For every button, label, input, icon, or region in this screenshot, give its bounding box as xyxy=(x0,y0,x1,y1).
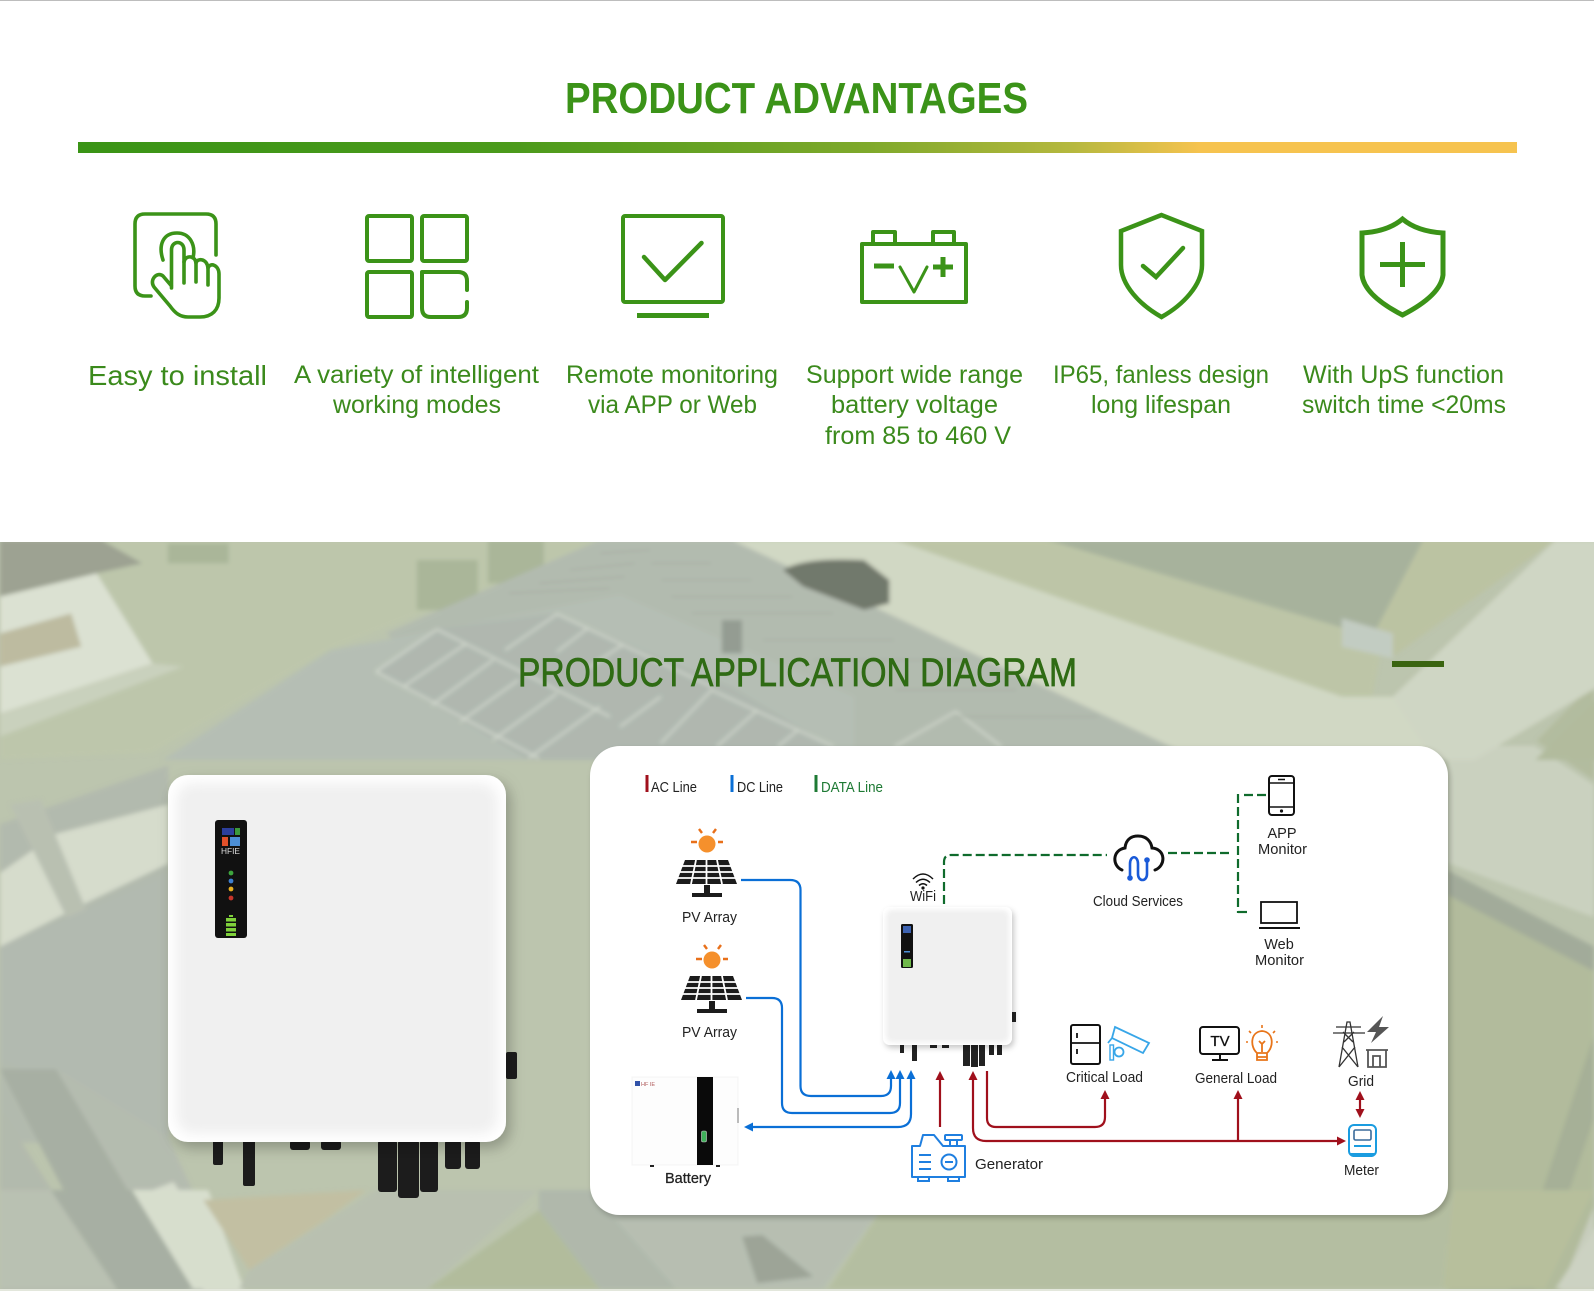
label xyxy=(1302,361,1506,419)
icon: critical load: Critical Load xyxy=(1066,1070,1143,1086)
label: With UpS function xyxy=(1303,361,1504,389)
icon: meter xyxy=(1344,1125,1379,1179)
icon: general load xyxy=(1195,1025,1278,1087)
inverter body xyxy=(168,775,506,1142)
label: from 85 to 460 V xyxy=(825,422,1011,450)
icon: web monitor laptop: Monitor xyxy=(1255,953,1304,969)
advantage: IP65 xyxy=(1053,215,1269,419)
label: Remote monitoring xyxy=(566,361,778,389)
AC lines xyxy=(936,1071,1364,1146)
icon: PV array 2 xyxy=(681,945,742,1041)
label: Easy to install xyxy=(88,360,267,391)
top rule xyxy=(0,0,1594,1)
icon: meter: Meter xyxy=(1344,1163,1379,1179)
title: product advantages: PRODUCT ADVANTAGES xyxy=(565,74,1028,123)
advantage: remote monitoring xyxy=(566,216,778,419)
icon: web monitor laptop xyxy=(1255,902,1304,969)
panel: application diagram xyxy=(590,746,1448,1215)
DC lines xyxy=(741,880,916,1132)
icon: generator: Generator xyxy=(975,1156,1043,1173)
small inverter xyxy=(883,907,1016,1067)
icon: grid tower xyxy=(1333,1016,1389,1090)
label: A variety of intelligent xyxy=(294,361,539,389)
icon: WiFi: WiFi xyxy=(910,889,936,905)
label: via APP or Web xyxy=(588,391,757,419)
product photo: large inverter xyxy=(168,775,517,1198)
background: aerial photo of house xyxy=(0,540,1594,1292)
legend: DATA Line xyxy=(821,780,883,796)
icon: touch hand xyxy=(135,214,219,317)
legend: DC Line xyxy=(737,780,783,796)
icon: window grid xyxy=(367,216,467,317)
icon: WiFi xyxy=(910,874,936,905)
icon: battery unit: HF IE xyxy=(641,1082,655,1088)
icon: cloud services xyxy=(1093,836,1183,910)
icon: app monitor phone: Monitor xyxy=(1258,842,1307,858)
label: switch time <20ms xyxy=(1302,391,1506,419)
advantage: UPS function xyxy=(1302,219,1506,419)
label: battery voltage xyxy=(831,391,998,419)
icon: web monitor laptop: Web xyxy=(1264,937,1294,953)
icon: general load: General Load xyxy=(1195,1071,1277,1087)
accent dash xyxy=(1392,661,1444,667)
data lines xyxy=(944,794,1266,913)
icon: generator xyxy=(912,1135,1043,1181)
icon: grid tower: Grid xyxy=(1348,1074,1374,1090)
icon: cloud services: Cloud Services xyxy=(1093,894,1183,910)
icon: critical load xyxy=(1066,1025,1149,1086)
label xyxy=(806,361,1023,450)
icon: monitor with check xyxy=(623,216,723,318)
icon: shield plus xyxy=(1362,219,1443,315)
icon: app monitor phone xyxy=(1258,776,1307,858)
icon: battery unit: Battery xyxy=(665,1170,711,1187)
advantage: wide battery voltage xyxy=(806,232,1023,450)
display strip xyxy=(215,820,247,938)
icon: app monitor phone: APP xyxy=(1267,826,1297,842)
icon: shield check xyxy=(1121,215,1202,317)
inverter face shading xyxy=(176,783,498,1134)
label xyxy=(566,361,778,419)
icon: PV array 1: PV Array xyxy=(682,909,737,926)
legend xyxy=(646,775,883,796)
icon: PV array 1 xyxy=(676,829,737,926)
label: working modes xyxy=(332,391,501,419)
icon: PV array 2: PV Array xyxy=(682,1024,737,1041)
advantage: easy to install xyxy=(88,214,267,391)
icon: general load: TV xyxy=(1210,1033,1230,1050)
icon: battery unit xyxy=(632,1077,739,1187)
bottom edge of photo xyxy=(0,1289,1594,1291)
title: product application diagram: PRODUCT APPLICATION DIAGRAM xyxy=(518,651,1077,695)
label: IP65, fanless design xyxy=(1053,361,1269,389)
label xyxy=(1053,361,1269,419)
legend: AC Line xyxy=(651,780,697,796)
advantage: intelligent modes xyxy=(294,216,539,419)
icon: battery xyxy=(862,232,966,302)
display strip: HFIE xyxy=(221,847,240,856)
label: Support wide range xyxy=(806,361,1023,389)
gradient bar xyxy=(78,142,1517,153)
label xyxy=(294,361,539,419)
connectors xyxy=(213,1052,517,1198)
label: long lifespan xyxy=(1091,391,1231,419)
